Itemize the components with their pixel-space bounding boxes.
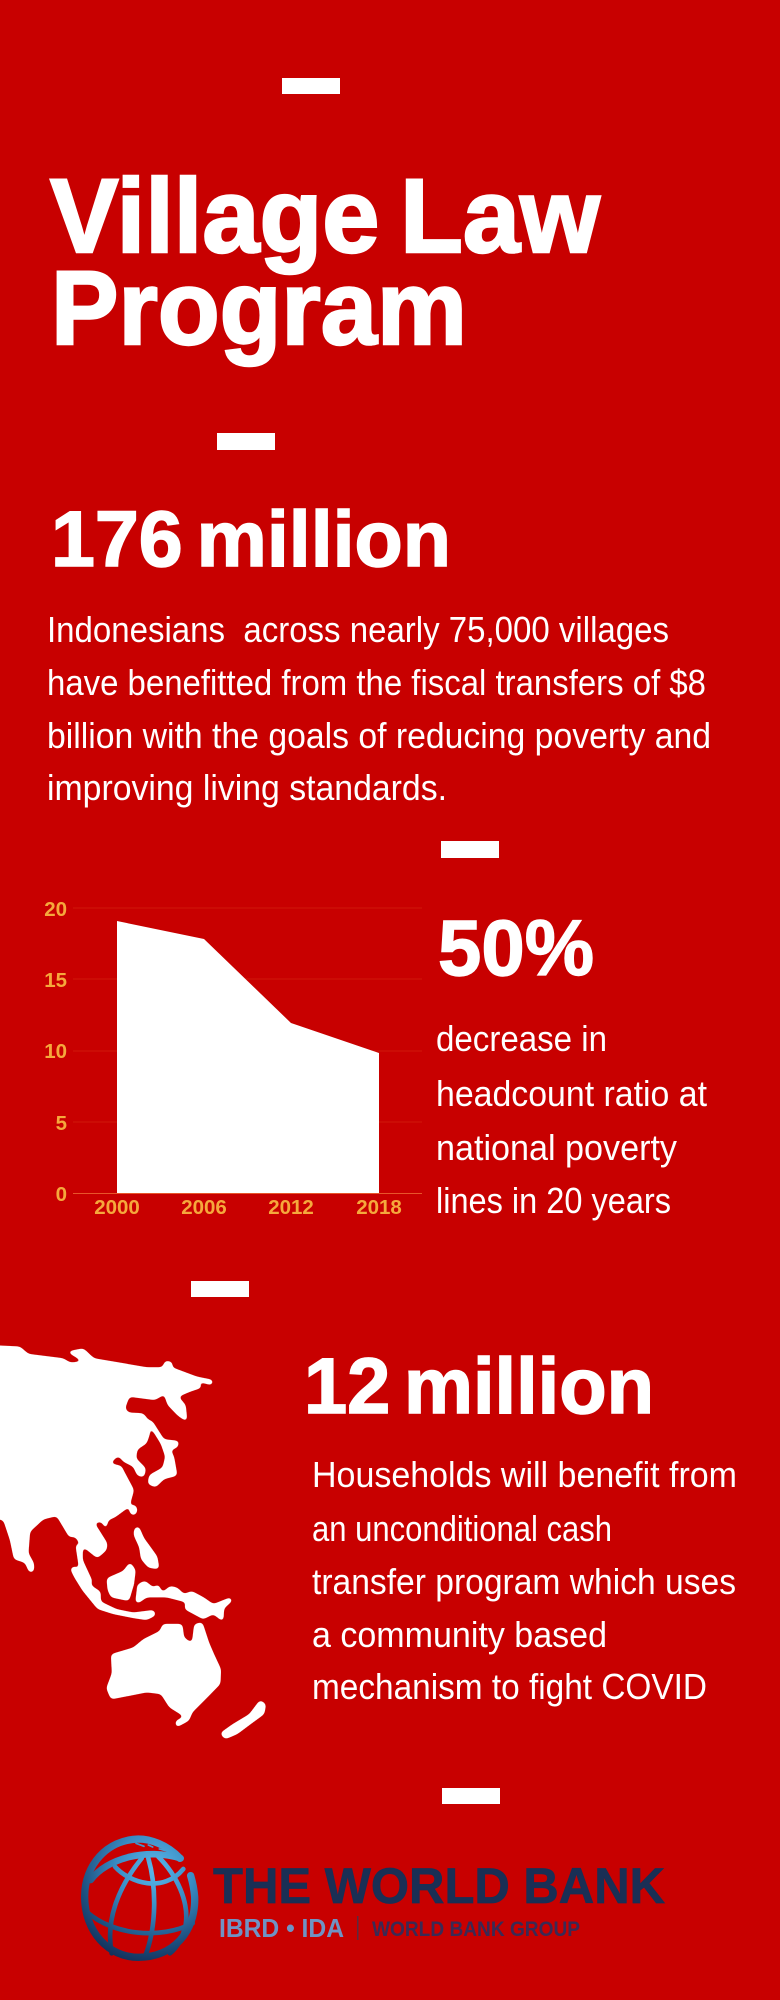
title: Village Law (50, 158, 600, 275)
text block: Households (312, 1454, 737, 1707)
stat: 50%: 50% (438, 903, 594, 992)
logo: The World Bank (85, 1839, 665, 1957)
IBRD IDA: IBRD • IDA (219, 1913, 344, 1943)
x axis labels (94, 1196, 402, 1219)
accent dash: section 2 (441, 841, 499, 858)
x axis labels: 2006 (181, 1196, 227, 1219)
Malay peninsula (75, 1543, 93, 1584)
accent dash: bottom (442, 1788, 500, 1804)
y axis labels (44, 898, 67, 1206)
text block: Households: an unconditional cash (312, 1508, 612, 1549)
text block: decrease: lines in 20 years (436, 1180, 671, 1221)
stat: 176 million: 176 million (51, 494, 451, 583)
text block: Households: transfer program which uses (312, 1561, 736, 1602)
text block: Indonesians: have benefitted from the fiscal transfers of $8 (47, 662, 706, 703)
area chart: poverty headcount (44, 898, 422, 1219)
Sulawesi and New Guinea (135, 1581, 233, 1622)
map: Asia-Pacific (0, 1345, 266, 1739)
accent dash: top (282, 78, 340, 94)
y axis labels: 0 (56, 1183, 67, 1206)
x axis labels: 2000 (94, 1196, 140, 1219)
text block: Households: a community based (312, 1614, 607, 1655)
Borneo (107, 1562, 136, 1601)
Australia (106, 1622, 221, 1728)
x axis labels: 2012 (268, 1196, 314, 1219)
text block: Indonesians (47, 609, 711, 808)
text block: Indonesians: billion with the goals of reducing poverty and (47, 715, 711, 756)
accent dash: section 3 (191, 1281, 249, 1297)
title (50, 158, 600, 367)
text block: decrease: decrease in (436, 1018, 607, 1059)
text block: decrease: national poverty (436, 1127, 677, 1168)
text block: decrease (436, 1018, 707, 1221)
Japan (145, 1419, 179, 1487)
Philippines (134, 1526, 159, 1569)
icon: globe (85, 1839, 195, 1957)
text block: Households: mechanism to fight COVID (312, 1666, 707, 1707)
title: Program (51, 250, 467, 367)
y axis labels: 10 (44, 1040, 67, 1063)
Taiwan (129, 1505, 137, 1515)
x axis labels: 2018 (356, 1196, 402, 1219)
stat: 12 million: 12 million (304, 1341, 654, 1430)
accent dash: section 1 (217, 433, 275, 450)
text block: Indonesians: Indonesians across nearly 75,000 villages (47, 609, 669, 650)
y axis labels: 20 (44, 898, 67, 921)
text block: decrease: headcount ratio at (436, 1073, 707, 1114)
y axis labels: 5 (56, 1112, 67, 1135)
World Bank Group: WORLD BANK GROUP (372, 1918, 580, 1941)
Sumatra and Java (70, 1566, 156, 1620)
New Zealand (220, 1700, 266, 1739)
wordmark: THE WORLD BANK (213, 1858, 665, 1914)
Kamchatka (164, 1387, 187, 1422)
y axis labels: 15 (44, 969, 67, 992)
text block: Households: Households will benefit from (312, 1454, 737, 1495)
text block: Indonesians: improving living standards. (47, 767, 447, 808)
chart area (117, 921, 379, 1193)
